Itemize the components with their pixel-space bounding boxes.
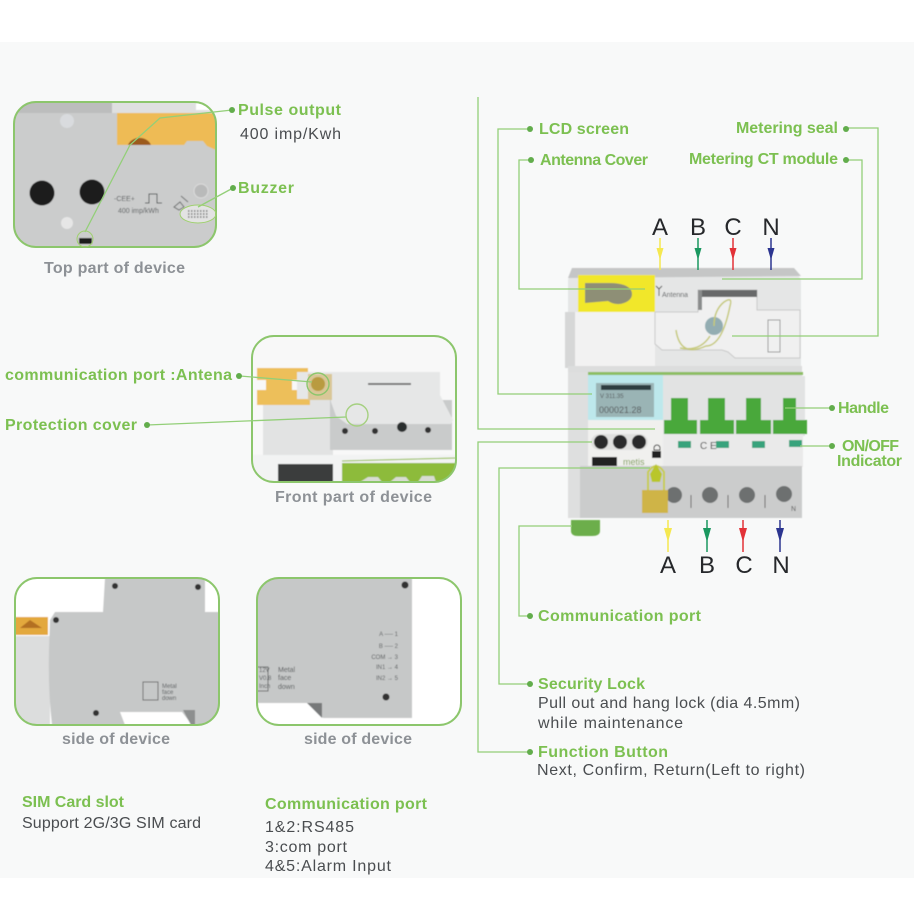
- callout: security lock: Security Lock: [538, 676, 645, 693]
- panel: side of device left: down: [162, 696, 176, 702]
- callout: antenna cover: Antenna Cover: [540, 152, 648, 169]
- callout: security lock: while maintenance: [537, 715, 683, 732]
- callout: handle: Handle: [838, 400, 889, 417]
- text block: SIM card slot: [22, 794, 201, 832]
- callout: metering seal: [732, 120, 878, 336]
- callout: communication port antenna: [5, 367, 329, 395]
- callout: LCD screen: LCD screen: [539, 121, 629, 138]
- callout: communication port: Communication port: [538, 608, 702, 625]
- arrows: bottom phase outputs: N: [772, 552, 790, 579]
- arrows: top phase inputs: B: [690, 214, 706, 241]
- text block: communication port notes: 1&2:RS485: [265, 819, 354, 836]
- panel: front part of device: [252, 336, 456, 482]
- device: breaker handles: [664, 398, 807, 434]
- device: main product illustration: [565, 268, 807, 536]
- panel: top part of device: -CEE+: [114, 196, 135, 203]
- text block: communication port notes: 4&5:Alarm Input: [265, 858, 392, 875]
- device: control buttons: [588, 420, 663, 468]
- device: green connector: [571, 520, 600, 536]
- callout: protection cover: Protection cover: [5, 417, 137, 434]
- callout: on/off indicator: Indicator: [837, 453, 902, 470]
- panel: side of device right: down: [278, 684, 295, 691]
- arrows: bottom phase outputs: [660, 520, 790, 579]
- arrows: top phase inputs: A: [652, 214, 668, 241]
- callout: on/off indicator: [800, 438, 902, 470]
- text block: communication port notes: 3:com port: [265, 839, 348, 856]
- caption: top part: Top part of device: [44, 260, 185, 277]
- panel: side of device left: face: [162, 690, 174, 696]
- panel border: [252, 336, 456, 482]
- panel: side of device right: A ── 1: [379, 632, 399, 638]
- panel: top part of device: 400 imp/kWh: [118, 208, 159, 215]
- callout: function button: Next, Confirm, Return(Left to right): [537, 762, 805, 779]
- device: mid section: [568, 366, 802, 390]
- arrows: top phase inputs: N: [762, 214, 780, 241]
- device: metering protection cover: Antenna: [662, 292, 688, 299]
- callout: on/off indicator: ON/OFF: [842, 438, 899, 455]
- callout: protection cover: [5, 404, 368, 434]
- text block: communication port notes: Communication port: [265, 796, 428, 813]
- callout: pulse output: [77, 102, 342, 247]
- device: LCD screen: 000021.28: [599, 405, 642, 415]
- callout: buzzer: [180, 180, 294, 223]
- panel border: [257, 578, 461, 725]
- caption: side right: side of device: [304, 731, 412, 748]
- callout: metering CT module: Metering CT module: [689, 151, 838, 168]
- device: metering protection cover: [655, 286, 800, 358]
- leader line: upper left rail: [478, 97, 655, 429]
- arrows: bottom phase outputs: A: [660, 552, 676, 579]
- arrows: bottom phase outputs: C: [735, 552, 753, 579]
- panel: side of device right: face: [278, 675, 291, 682]
- panel: side of device right: IN2 → 5: [376, 676, 399, 682]
- callout: communication port: [519, 526, 702, 625]
- caption: side left: side of device: [62, 731, 170, 748]
- panel: side of device right: IN1 → 4: [376, 665, 399, 671]
- panel border: [15, 578, 219, 725]
- device: upper housing: [565, 268, 801, 372]
- panel: side of device right: [250, 578, 461, 725]
- device: indicator strip: [663, 434, 803, 467]
- arrows: top phase inputs: [652, 214, 780, 270]
- device: indicator strip: C E: [700, 441, 717, 452]
- panel: side of device right: Metal: [278, 667, 296, 674]
- panel: side of device right: V0.8: [259, 676, 272, 682]
- callout: metering CT module: [689, 151, 862, 279]
- device: padlock: [642, 445, 668, 513]
- callout: communication port antenna: communication port :Antena: [5, 367, 232, 384]
- panel: top part of device: [14, 102, 216, 247]
- arrows: top phase inputs: C: [724, 214, 742, 241]
- arrows: bottom phase outputs: B: [699, 552, 715, 579]
- device: LCD screen: V 311.35: [600, 394, 624, 400]
- device: terminal block: N: [791, 506, 796, 513]
- callout: pulse output: Pulse output: [238, 102, 342, 119]
- callout: function button: [478, 442, 805, 779]
- callout: handle: [785, 400, 889, 417]
- device: terminal block: [580, 466, 802, 518]
- text block: SIM card slot: SIM Card slot: [22, 794, 125, 811]
- panel: side of device left: Metal: [162, 684, 177, 690]
- device: LCD screen: [588, 375, 663, 420]
- callout: pulse output: 400 imp/Kwh: [240, 126, 341, 143]
- callout: antenna cover: [519, 152, 648, 289]
- panel: side of device right: Inch: [259, 684, 270, 690]
- text block: SIM card slot: Support 2G/3G SIM card: [22, 815, 201, 832]
- callout: metering seal: Metering seal: [736, 120, 838, 137]
- text block: communication port notes: [265, 796, 428, 875]
- device: control buttons: metis: [623, 457, 645, 467]
- callout: security lock: [499, 468, 800, 732]
- caption: front part: Front part of device: [275, 489, 432, 506]
- callout: function button: Function Button: [538, 744, 668, 761]
- panel: side of device right: 12V: [259, 668, 270, 674]
- panel: side of device right: B ── 2: [379, 644, 399, 650]
- callout: buzzer: Buzzer: [238, 180, 294, 197]
- callout: security lock: Pull out and hang lock (dia 4.5mm): [538, 695, 800, 712]
- panel border: [14, 102, 216, 247]
- callout: LCD screen: [498, 121, 629, 394]
- panel: side of device right: COM → 3: [371, 655, 399, 661]
- panel: side of device left: [15, 578, 219, 725]
